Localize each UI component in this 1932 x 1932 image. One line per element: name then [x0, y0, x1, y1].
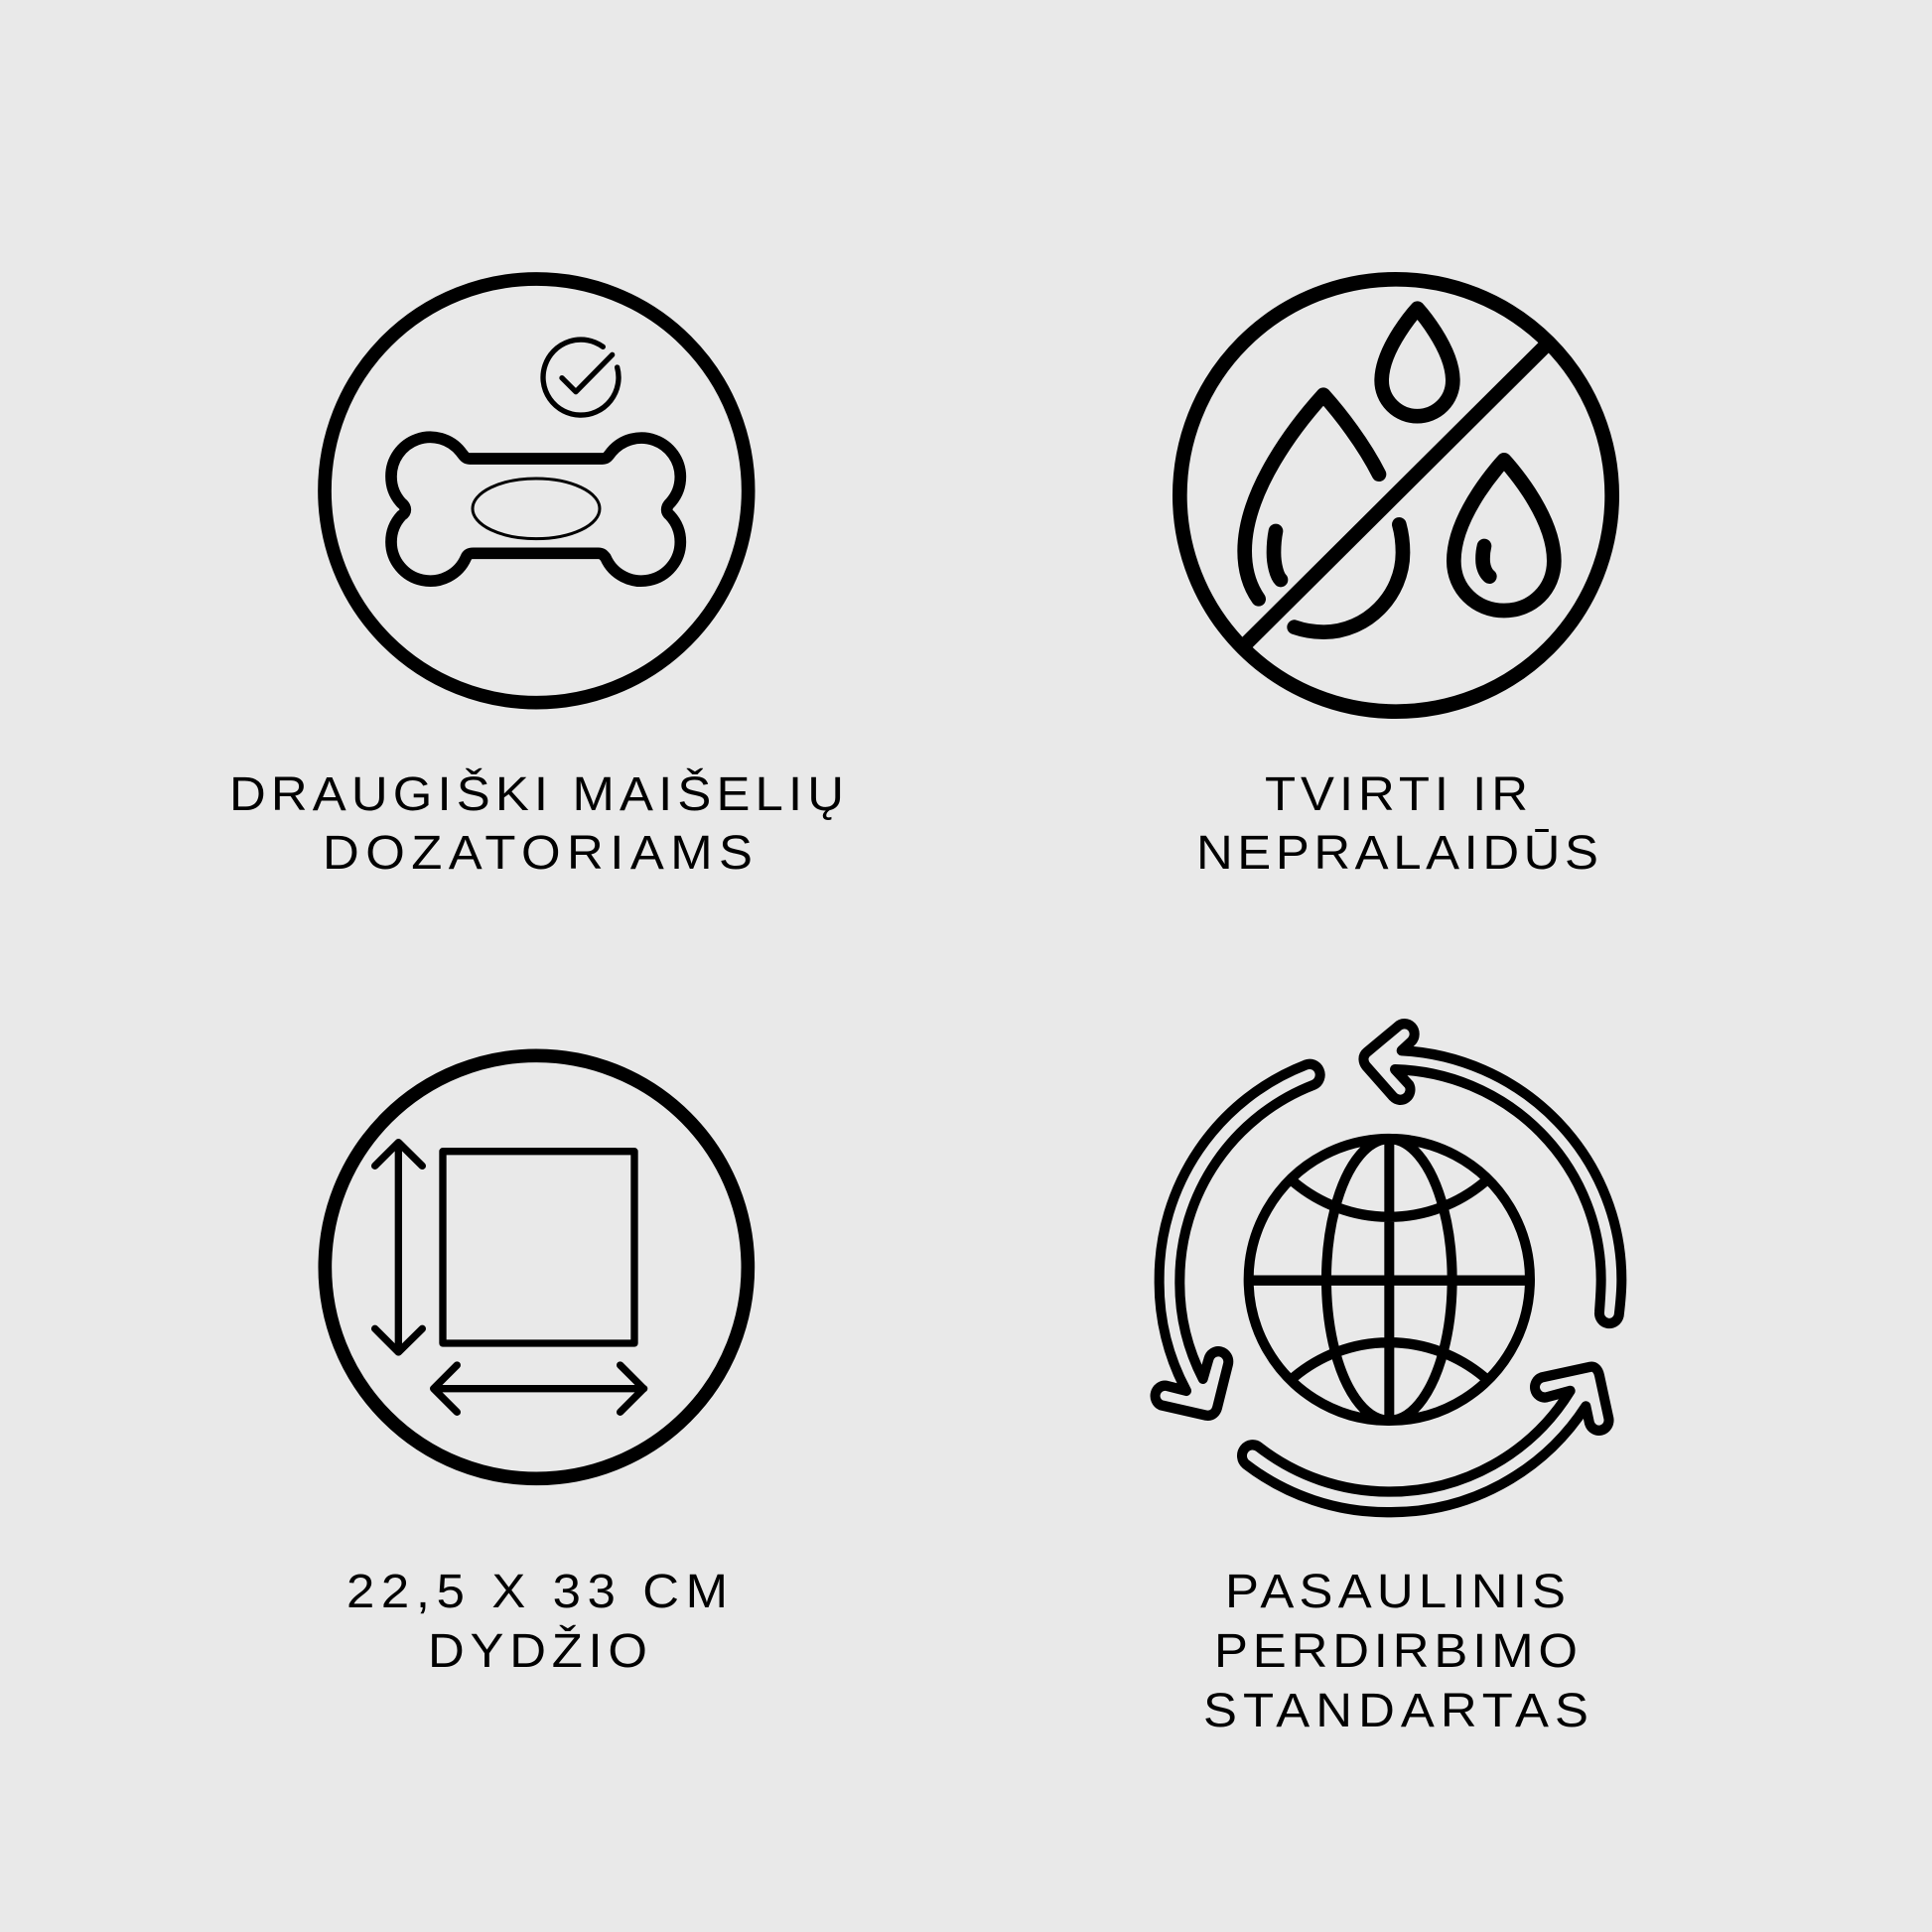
text: pasaulinis perdirbimo standartas: PASAULINIS — [1225, 1565, 1566, 1618]
horizontal arrow — [434, 1365, 644, 1412]
text: tvirti ir nepralaidus — [1196, 767, 1598, 880]
text: tvirti ir nepralaidus: TVIRTI IR — [1265, 767, 1528, 821]
top drop — [1382, 309, 1452, 416]
icon ring — [325, 1055, 748, 1478]
large broken drop — [1245, 395, 1403, 632]
panel: strong and leakproof — [1179, 279, 1612, 880]
icon ring — [325, 279, 749, 703]
square — [443, 1152, 634, 1343]
panel: global recycling standard — [1156, 1024, 1621, 1737]
right drop — [1453, 460, 1554, 611]
icon: bone in a circle with check mark — [325, 279, 749, 703]
icon: crossed out water drops — [1179, 279, 1612, 712]
text: pasaulinis perdirbimo standartas: STANDARTAS — [1203, 1684, 1588, 1737]
vertical arrow — [375, 1143, 422, 1352]
text: 22,5 x 33 cm dydzio: DYDŽIO — [428, 1624, 647, 1678]
bag oval — [473, 479, 600, 539]
text: draugiski maiseliu dozatoriams: DOZATORIAMS — [323, 826, 753, 880]
panel: size — [325, 1055, 748, 1678]
text: pasaulinis perdirbimo standartas: PERDIRBIMO — [1214, 1624, 1578, 1678]
icon: square with dimension arrows in a circle — [325, 1055, 748, 1478]
globe — [1249, 1139, 1530, 1421]
icon ring — [1179, 279, 1612, 712]
panel: bag dispenser compatibility — [229, 279, 844, 880]
text: 22,5 x 33 cm dydzio: 22,5 X 33 CM — [346, 1565, 728, 1618]
arrow: left — [1156, 1064, 1320, 1416]
text: pasaulinis perdirbimo standartas — [1203, 1565, 1588, 1737]
check badge — [543, 340, 619, 415]
text: tvirti ir nepralaidus: NEPRALAIDŪS — [1196, 826, 1598, 880]
text: draugiski maiseliu dozatoriams — [229, 766, 844, 880]
bone outline — [391, 437, 680, 581]
slash — [1243, 345, 1547, 647]
arrow: bottom — [1242, 1367, 1609, 1512]
arrow: top right — [1363, 1024, 1621, 1323]
text: draugiski maiseliu dozatoriams: DRAUGIŠKI MAIŠELIŲ — [229, 766, 844, 821]
text: 22,5 x 33 cm dydzio — [346, 1565, 728, 1678]
icon: globe with recycling arrows — [1156, 1024, 1621, 1512]
